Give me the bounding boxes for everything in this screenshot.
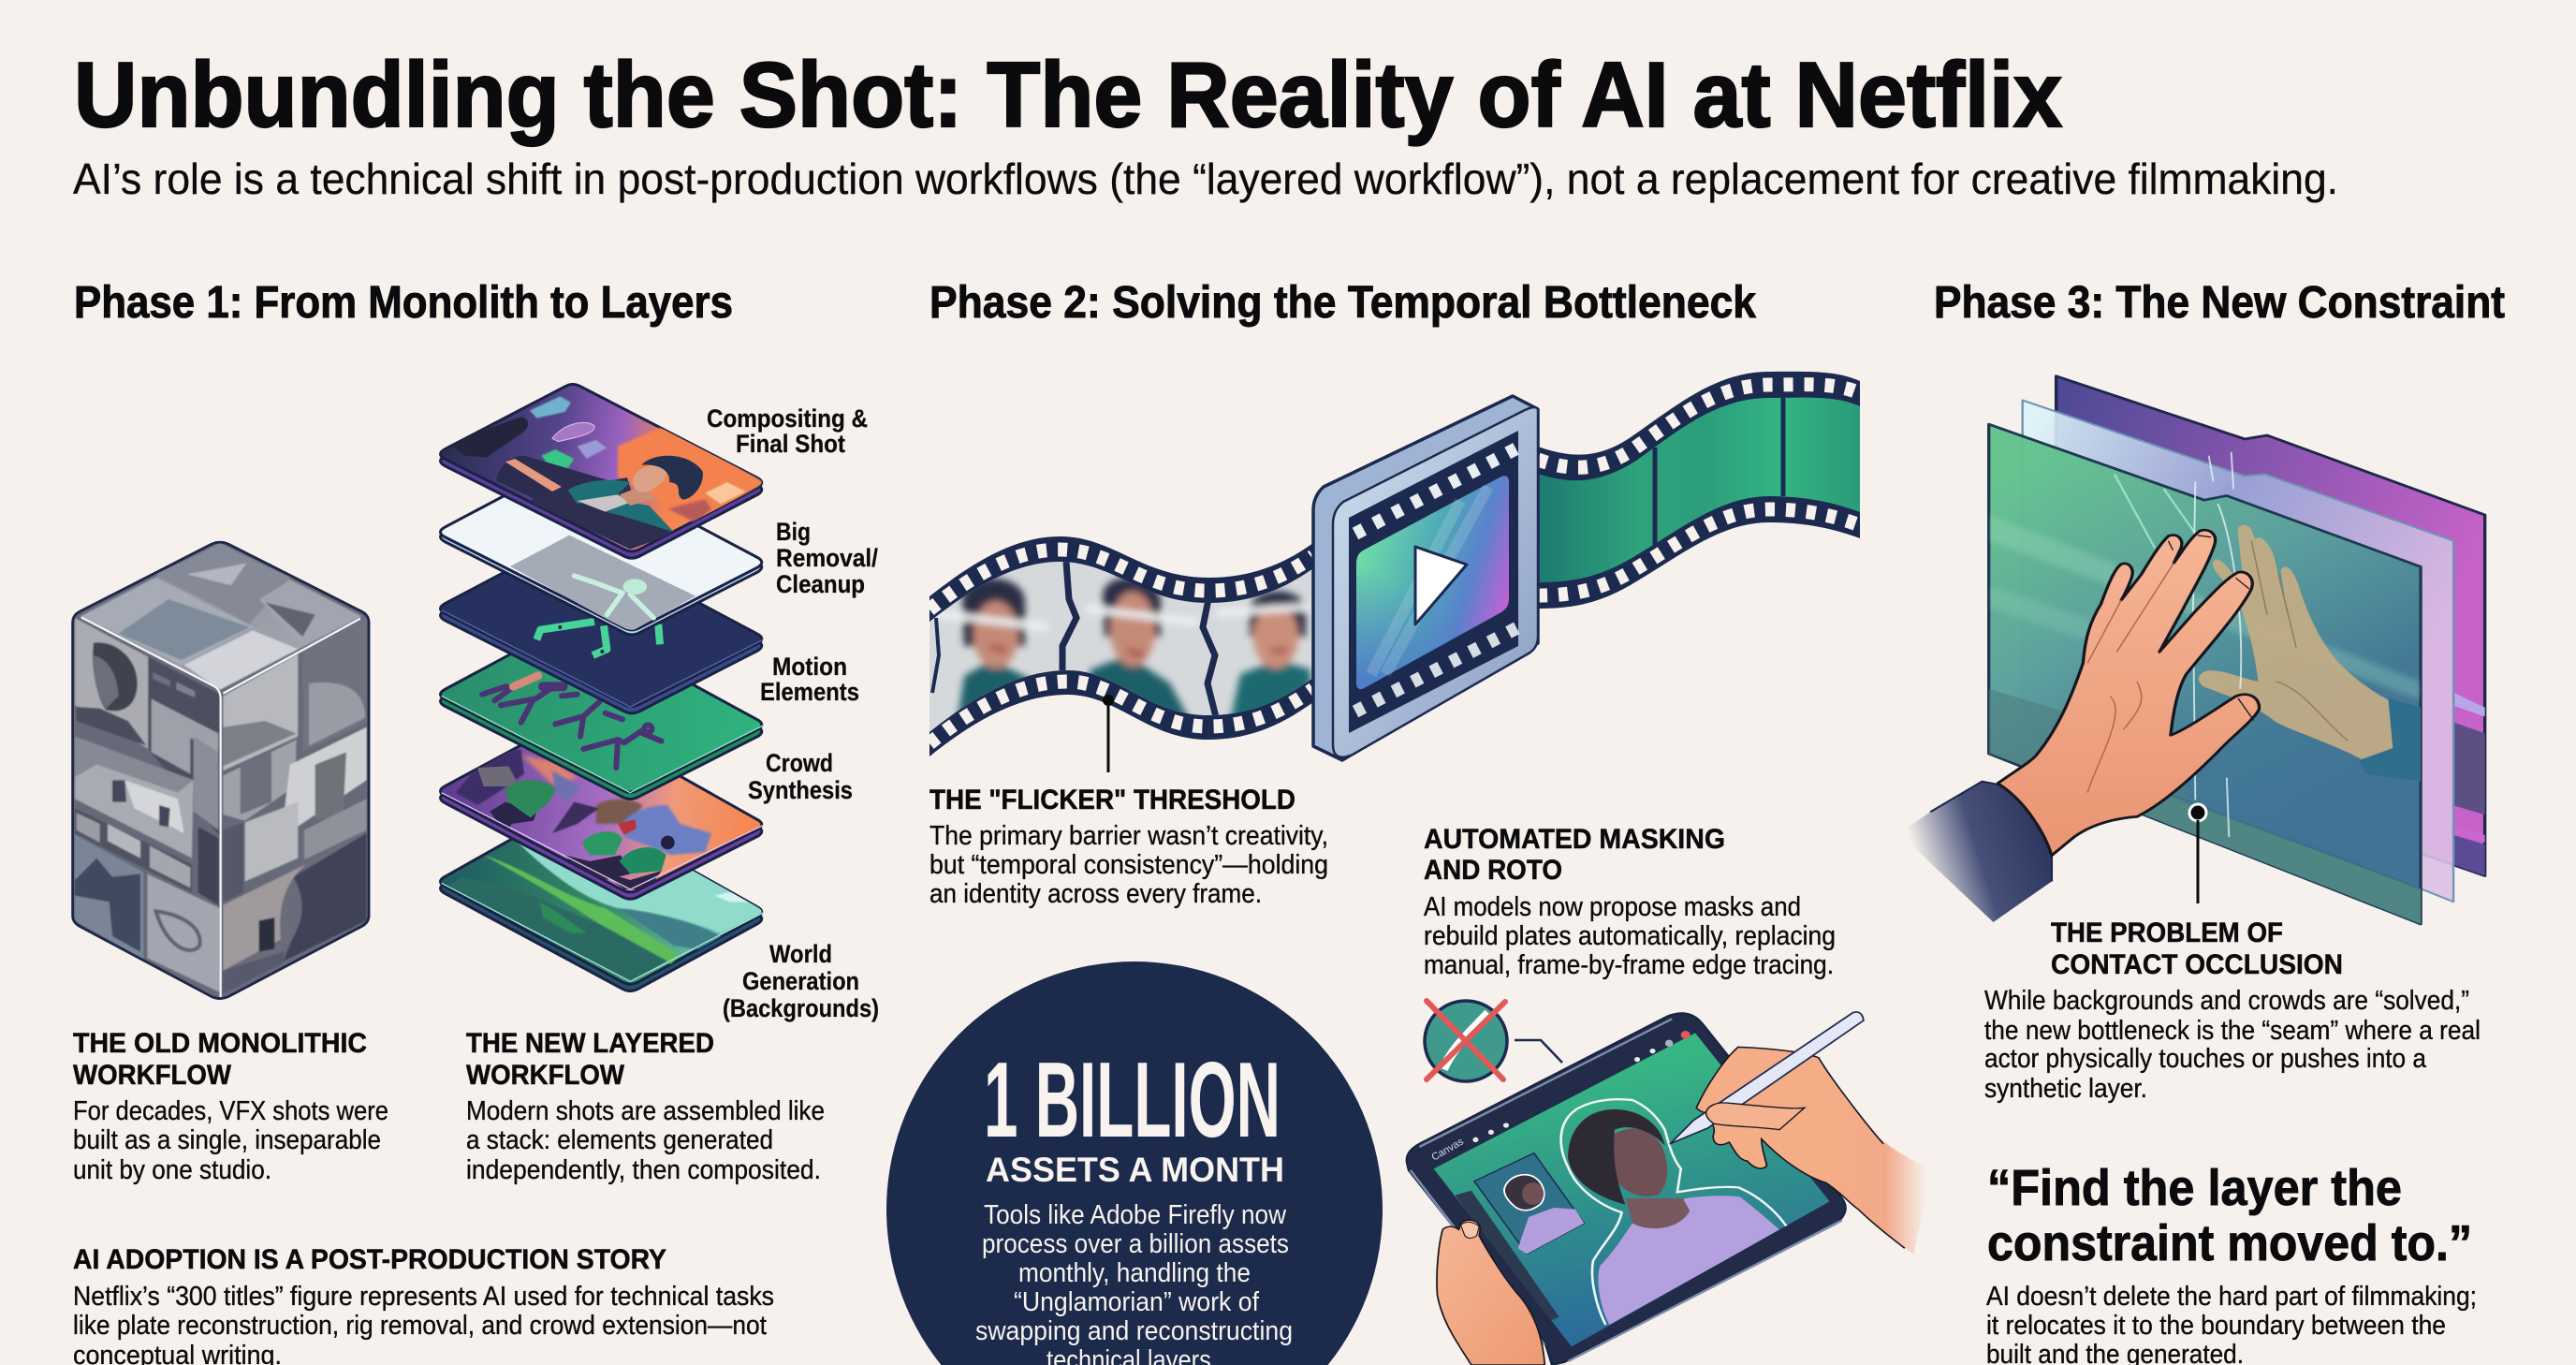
film strip: clean green frames — [1538, 372, 1860, 609]
front green layer — [1989, 424, 2421, 924]
stat circle: 1 billion assets — [886, 961, 1383, 1365]
text block: contact occlusion: the new bottleneck is the “seam” where a real — [1984, 1016, 2481, 1046]
label: rig removal cleanup: Cleanup — [776, 570, 865, 598]
rig limbs — [536, 622, 660, 655]
text block: old monolithic workflow: For decades, VFX shots were — [73, 1096, 388, 1126]
layer: crowd synthesis — [439, 745, 764, 901]
film strip: flickering frames — [927, 536, 1320, 756]
text block: contact occlusion: THE PROBLEM OF — [2051, 917, 2283, 948]
label: rig removal cleanup: Big — [776, 518, 811, 546]
text block: new layered workflow: WORKFLOW — [466, 1060, 625, 1091]
layer: rig removal cleanup — [439, 496, 764, 637]
layer: rig navy — [440, 537, 763, 713]
pull quote: constraint moved to.” — [1987, 1215, 2472, 1271]
left hand — [1437, 1220, 1544, 1365]
label: crowd synthesis: Crowd — [766, 749, 833, 777]
subtitle: AI’s role is a technical shift in post-production workflows (the “layered workflow”), not a replacement for creative filmmaking. — [73, 154, 2338, 203]
label: world generation: (Backgrounds) — [723, 994, 879, 1022]
label: motion elements: Motion — [772, 653, 847, 681]
text block: flicker threshold: an identity across every frame. — [929, 879, 1262, 909]
heading: phase 1: Phase 1: From Monolith to Layers — [74, 278, 733, 328]
tablet body — [1407, 1013, 1846, 1365]
cube left face — [75, 618, 148, 749]
text block: ai adoption: like plate reconstruction, rig removal, and crowd extension—not — [73, 1311, 767, 1341]
hand — [1998, 530, 2260, 856]
text block: automated masking: AND ROTO — [1424, 855, 1562, 886]
stat circle: 1 billion assets: Tools like Adobe Firefly now — [984, 1200, 1287, 1230]
text block: automated masking: rebuild plates automatically, replacing — [1424, 921, 1836, 951]
title: Unbundling the Shot: The Reality of AI at Netflix — [74, 43, 2062, 146]
panel: phase 2 — [886, 278, 1932, 1365]
text block: flicker threshold: THE "FLICKER" THRESHOLD — [929, 785, 1295, 815]
text block: quote explanation: it relocates it to the boundary between the — [1986, 1311, 2446, 1341]
middle pale layer — [2023, 400, 2453, 902]
leader line: contact occlusion — [2189, 804, 2206, 903]
text block: new layered workflow — [466, 1028, 825, 1185]
leader line: flicker — [1103, 695, 1114, 772]
text block: flicker threshold — [929, 785, 1328, 909]
text block: quote explanation: AI doesn’t delete the hard part of filmmaking; — [1986, 1282, 2477, 1312]
cuff — [1899, 782, 2052, 922]
label: world generation — [723, 940, 879, 1022]
text block: automated masking: AUTOMATED MASKING — [1424, 824, 1725, 855]
icon: monolith cube — [73, 542, 369, 998]
text block: ai adoption: Netflix’s “300 titles” figure represents AI used for technical tasks — [73, 1282, 774, 1312]
thumb over stylus — [1706, 1103, 1805, 1130]
text block: ai adoption — [73, 1244, 774, 1365]
text block: contact occlusion — [1984, 917, 2481, 1104]
text block: new layered workflow: a stack: elements generated — [466, 1125, 773, 1155]
stat circle: 1 billion assets: 1 BILLION — [984, 1041, 1281, 1160]
text block: new layered workflow: Modern shots are assembled like — [466, 1096, 825, 1126]
label: compositing and final shot: Compositing & — [707, 404, 868, 433]
text block: automated masking — [1424, 824, 1836, 980]
tablet app label: Canvas — [1430, 1136, 1466, 1164]
cube top face — [80, 543, 362, 690]
hand holding stylus — [1696, 1047, 1932, 1255]
icon: video processing device — [1313, 396, 1538, 760]
back purple layer — [2056, 376, 2485, 876]
text block: old monolithic workflow — [73, 1028, 388, 1185]
toolbar dots — [1456, 1031, 1690, 1151]
label: motion elements — [760, 653, 859, 706]
text block: old monolithic workflow: built as a single, inseparable — [73, 1125, 381, 1155]
tablet screen — [1434, 1033, 1830, 1346]
label: compositing and final shot — [707, 404, 868, 458]
icon: crossed out manual mask — [1425, 1001, 1562, 1081]
reflected hand behind glass — [2199, 525, 2393, 759]
cube right face — [223, 653, 298, 771]
stat circle: 1 billion assets: process over a billion assets — [982, 1229, 1289, 1259]
layer: compositing final shot — [440, 384, 765, 558]
label: compositing and final shot: Final Shot — [736, 430, 845, 458]
label: world generation: World — [769, 940, 832, 968]
layer: motion elements — [439, 653, 764, 800]
panel: phase 1 — [73, 278, 879, 1365]
label: rig removal cleanup: Removal/ — [776, 544, 878, 572]
text block: contact occlusion: While backgrounds and crowds are “solved,” — [1984, 986, 2469, 1016]
icon: play button — [1415, 547, 1467, 624]
text block: old monolithic workflow: unit by one studio. — [73, 1155, 271, 1185]
stat circle: 1 billion assets: ASSETS A MONTH — [986, 1151, 1284, 1189]
text block: old monolithic workflow: THE OLD MONOLITHIC — [73, 1028, 367, 1059]
text block: ai adoption: AI ADOPTION IS A POST-PRODUCTION STORY — [73, 1244, 666, 1275]
panel: phase 3 — [1899, 278, 2505, 1365]
stat circle: 1 billion assets: “Unglamorian” work of — [1014, 1287, 1260, 1317]
chart: exploded layer stack — [440, 384, 765, 991]
text block: automated masking: AI models now propose masks and — [1424, 892, 1801, 922]
pull quote: “Find the layer the — [1987, 1160, 2402, 1216]
illustration: hand touching layers — [1899, 376, 2485, 924]
heading: phase 3: Phase 3: The New Constraint — [1934, 278, 2505, 328]
text block: contact occlusion: actor physically touches or pushes into a — [1984, 1044, 2427, 1074]
label: crowd synthesis: Synthesis — [748, 776, 853, 804]
stylus — [1670, 1012, 1864, 1144]
text block: quote explanation — [1986, 1282, 2477, 1365]
label: motion elements: Elements — [760, 678, 859, 706]
label: world generation: Generation — [742, 967, 859, 995]
text block: contact occlusion: CONTACT OCCLUSION — [2051, 949, 2343, 980]
text block: new layered workflow: THE NEW LAYERED — [466, 1028, 714, 1059]
label: rig removal cleanup — [776, 518, 878, 598]
heading: phase 2: Phase 2: Solving the Temporal Bottleneck — [929, 278, 1756, 328]
icon: tablet with masking — [1407, 1012, 1932, 1365]
text block: new layered workflow: independently, then composited. — [466, 1155, 821, 1185]
stat circle: 1 billion assets: monthly, handling the — [1018, 1258, 1251, 1288]
label: crowd synthesis — [748, 749, 853, 804]
text block: flicker threshold: The primary barrier wasn’t creativity, — [929, 821, 1328, 851]
stat circle: 1 billion assets: swapping and reconstructing — [975, 1316, 1293, 1346]
text block: automated masking: manual, frame-by-frame edge tracing. — [1424, 950, 1834, 980]
text block: flicker threshold: but “temporal consistency”—holding — [929, 850, 1328, 880]
text block: contact occlusion: synthetic layer. — [1984, 1074, 2147, 1104]
text block: old monolithic workflow: WORKFLOW — [73, 1060, 232, 1091]
layer: world generation — [439, 839, 764, 992]
